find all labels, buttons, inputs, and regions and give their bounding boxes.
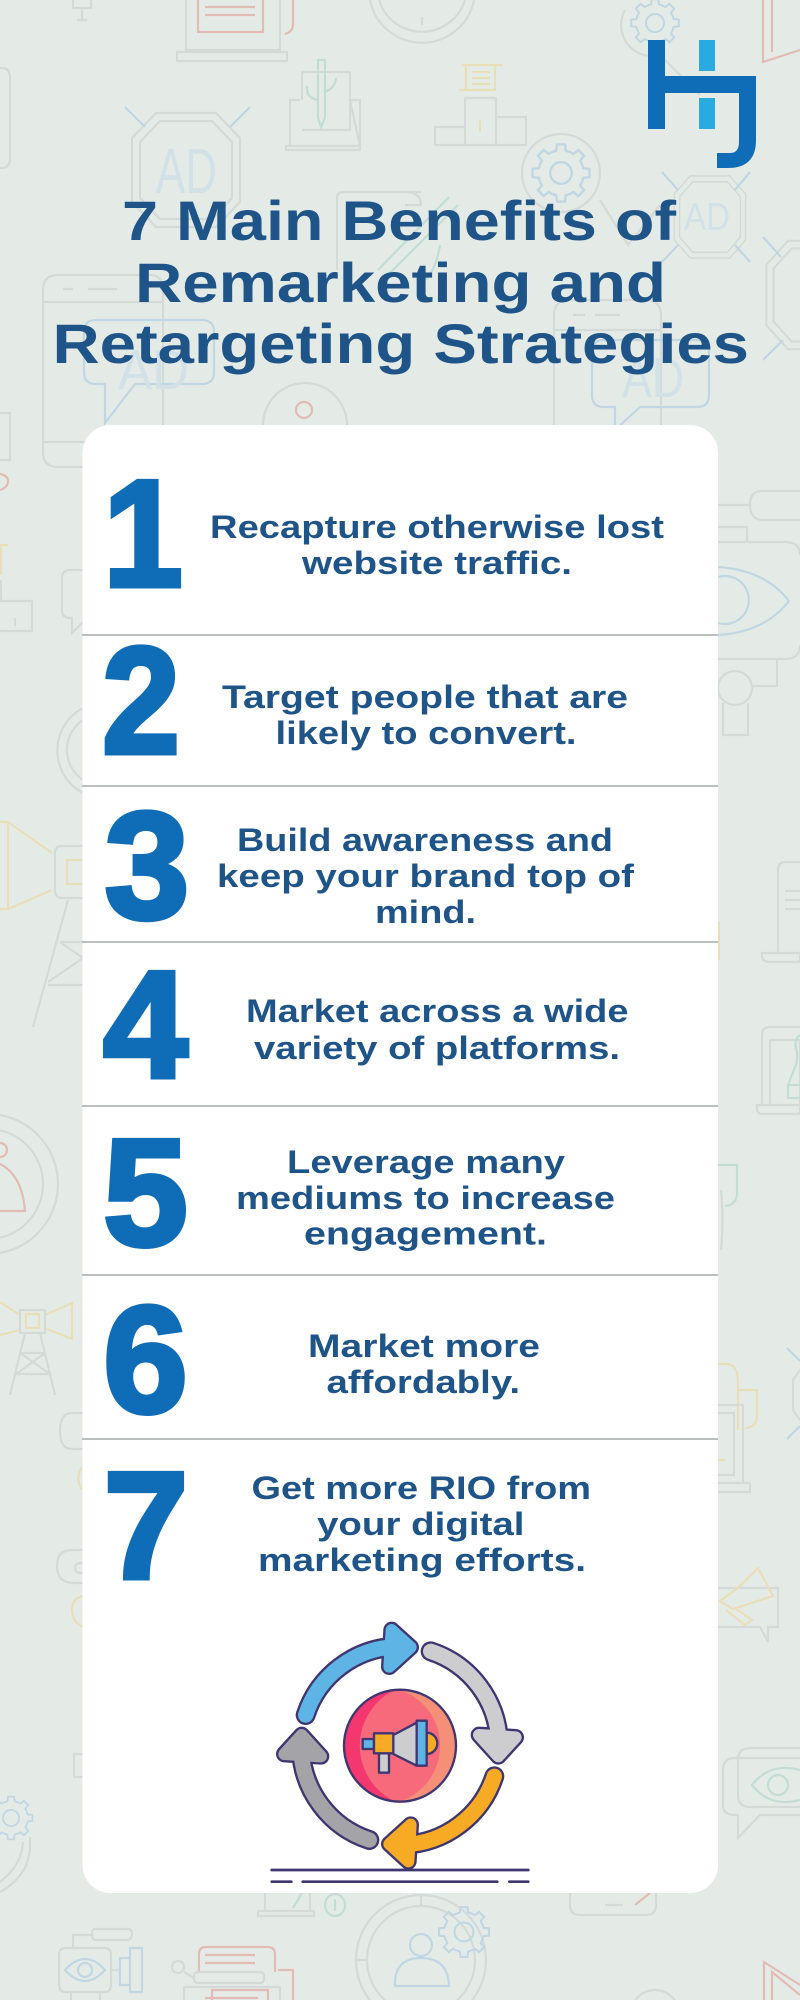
benefit 1: 1 xyxy=(103,449,183,619)
benefit 6 xyxy=(82,1275,718,1445)
background icon pattern: AD xyxy=(622,346,684,409)
benefit 1 xyxy=(82,449,718,636)
center badge xyxy=(342,1688,458,1803)
benefit 2 xyxy=(82,616,718,787)
benefit 4: 4 xyxy=(103,940,188,1110)
panel: benefits card xyxy=(82,425,718,1893)
icon: remarketing cycle with megaphone xyxy=(272,1630,528,1882)
benefit 2: 2 xyxy=(102,616,180,785)
benefit 2: Target people that are xyxy=(222,679,628,715)
ground lines xyxy=(272,1870,528,1882)
benefit 7: marketing efforts. xyxy=(258,1542,586,1578)
benefit 6: Market more xyxy=(308,1328,540,1364)
logo xyxy=(648,40,756,168)
benefit 5: engagement. xyxy=(304,1216,547,1252)
benefit 3: Build awareness and xyxy=(237,822,613,858)
benefit 5: mediums to increase xyxy=(236,1180,615,1216)
benefit 3: mind. xyxy=(375,894,476,930)
benefit 7: 7 xyxy=(104,1441,188,1611)
background icon pattern: AD xyxy=(684,196,730,239)
title: Remarketing and xyxy=(135,251,666,314)
benefit 3: keep your brand top of xyxy=(217,858,634,894)
background icon pattern: AD xyxy=(118,338,189,401)
title xyxy=(52,189,749,375)
benefit 5 xyxy=(82,1108,718,1278)
benefit 7 xyxy=(104,1441,591,1611)
benefit 1: Recapture otherwise lost xyxy=(210,509,664,545)
benefit 7: your digital xyxy=(317,1506,524,1542)
arrow: light gray xyxy=(431,1651,516,1756)
benefit 6: affordably. xyxy=(326,1364,520,1400)
benefit 1: website traffic. xyxy=(301,545,572,581)
benefit 3: 3 xyxy=(105,781,189,951)
benefit 4 xyxy=(82,940,718,1110)
benefit 4: variety of platforms. xyxy=(254,1030,620,1066)
icon: megaphone xyxy=(363,1721,437,1773)
benefit 5: Leverage many xyxy=(287,1144,565,1180)
benefit 6: 6 xyxy=(103,1275,188,1445)
arrow: blue xyxy=(306,1630,411,1715)
benefit 3 xyxy=(82,781,718,951)
benefit 4: Market across a wide xyxy=(246,993,628,1029)
title: Retargeting Strategies xyxy=(52,312,749,375)
benefit 5: 5 xyxy=(103,1108,188,1278)
background icon pattern: AD xyxy=(156,135,217,207)
arrow: orange xyxy=(389,1776,494,1861)
title: 7 Main Benefits of xyxy=(122,189,676,252)
benefit 2: likely to convert. xyxy=(276,715,576,751)
benefit 7: Get more RIO from xyxy=(252,1470,591,1506)
arrow: dark gray xyxy=(284,1735,369,1840)
